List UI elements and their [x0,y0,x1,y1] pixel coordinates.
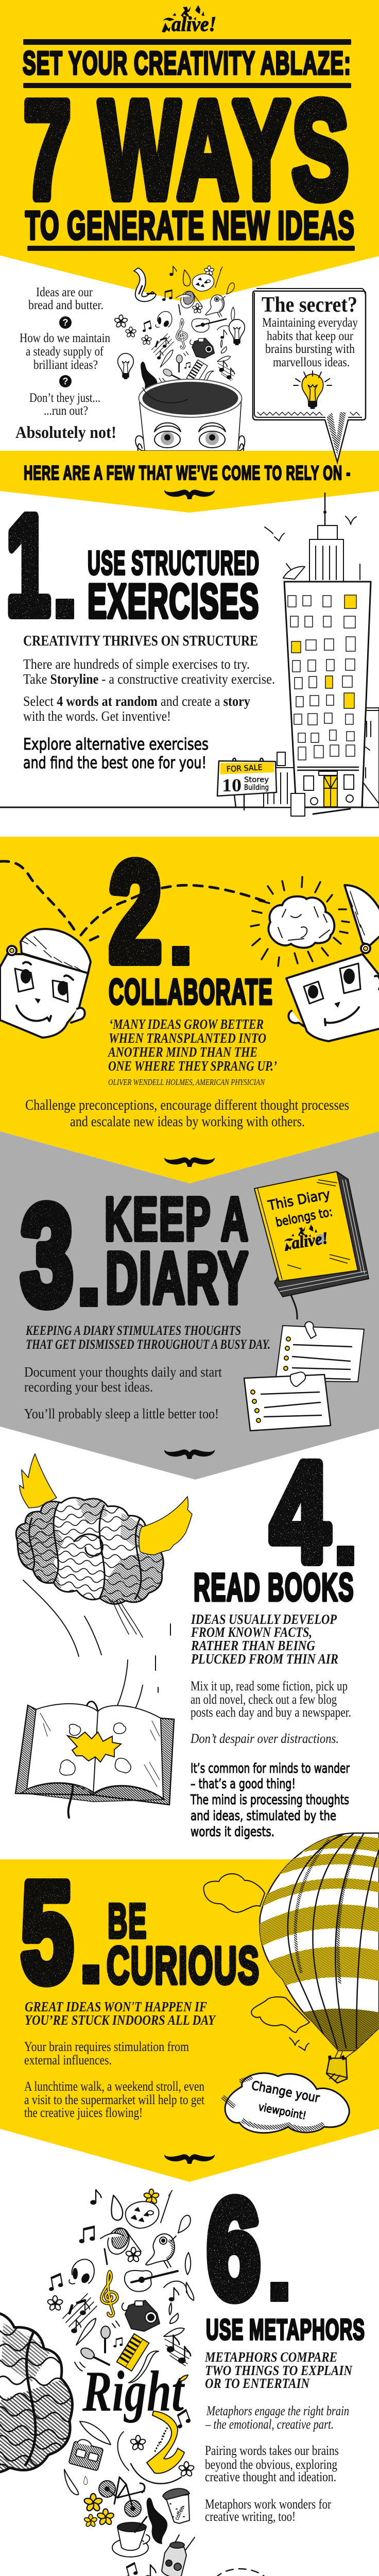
icon: speech drop [178,2215,191,2233]
subheading [25,1323,270,1352]
panel: header [0,0,379,303]
quote attribution: OLIVER WENDELL HOLMES, AMERICAN PHYSICIAN [108,1077,265,1087]
illustration: pinned note back [275,1321,364,1382]
icon: bicycle [99,2477,145,2517]
windows [288,595,356,760]
text block: intro questions: bread and butter. [28,298,104,312]
number: 2: 2 [109,834,164,990]
quote: ANOTHER MIND THAN THE [107,1044,257,1060]
icon: note [169,2287,179,2301]
icon: maraca [101,2321,119,2352]
subheading: THAT GET DISMISSED THROUGHOUT A BUSY DAY. [26,1337,270,1352]
text: this diary belongs to: belongs to: [274,1205,334,1230]
icon: notes [79,2226,95,2243]
icon: drops [64,2469,88,2495]
illustration: winged brain [0,1454,192,1637]
icon: sheet music [63,2294,97,2333]
icon: saxophone [131,2411,184,2484]
heading: keep a: KEEP A [105,1185,249,1253]
icon: treble clef [101,2272,117,2316]
icon: paint brush [161,2191,172,2223]
panel: intro [0,256,379,451]
icon: moustache divider [164,2154,215,2164]
subheading: YOU’RE STUCK INDOORS ALL DAY [25,2012,216,2028]
icon: left eye [154,423,181,448]
body text: beyond the obvious, exploring [205,2457,337,2472]
icon: right wing [139,1497,192,1555]
handwritten note [190,1761,350,1840]
icon: notes [123,2563,139,2576]
body text: and escalate new ideas by working with others. [70,1114,305,1130]
icon: small notes [113,2337,123,2347]
text: maintaining habits: brains bursting with [265,342,355,356]
number: 5: 5 [21,1854,76,2010]
body text: Pairing words takes our brains [205,2443,339,2458]
icon: drum stick [105,2249,107,2264]
icon: boombox [68,2439,104,2471]
icon: brain stem [112,1600,143,1637]
icon: burst [67,1732,121,1762]
body text [25,1097,349,1130]
handwritten note: – that’s a good thing! [191,1776,296,1792]
body text: the creative juices flowing! [24,2105,143,2120]
icon: tea cup [112,2517,150,2557]
icon: yellow drop [179,2375,188,2381]
body text: Metaphors work wonders for [205,2497,331,2512]
body text: creative writing, too! [205,2509,296,2524]
subheading: IDEAS USUALLY DEVELOP [191,1612,337,1627]
text: the secret: The secret? [262,293,357,317]
number: 3: 3 [21,1177,76,1333]
handwritten note: explore alternatives: and find the best one for you! [23,754,206,772]
subheading [191,1612,338,1667]
sign: for sale 10 storey building: Building [244,784,269,792]
icon: right bulb [229,319,245,345]
text block: storyline exercise: Select 4 words at random and create a story [23,693,250,709]
icon: ears [135,436,245,451]
text block: intro questions: Absolutely not! [15,423,116,442]
number: 6: 6 [207,2171,263,2327]
icon: moustache divider [164,489,215,499]
italic note [205,2403,349,2432]
word: right: Right [82,2360,185,2424]
body text: Your brain requires stimulation from [24,2039,189,2054]
quote: WHEN TRANSPLANTED INTO [109,1030,266,1046]
icon: flower [125,2247,142,2263]
panel: 2 collaborate [0,834,379,1183]
number: 4: 4 [271,1434,332,1590]
illustration: ideas doodles above head [141,266,237,392]
quote: ONE WHERE THEY SPRANG UP.’ [108,1058,277,1074]
subheading: FROM KNOWN FACTS, [191,1624,312,1640]
icon: jar [162,2535,195,2576]
icon: drops [164,2303,184,2336]
text block: storyline exercise: with the words. Get inventive! [23,708,171,724]
panel: 1 use structured exercises [0,487,379,837]
text: this diary belongs to [266,1187,335,1231]
heading: curious: CURIOUS [107,1936,260,1995]
icon: satellite dish [283,564,305,579]
panel: 6 use metaphors [0,2129,379,2576]
illustration: right brain half [0,2286,107,2503]
icon: moustache [141,362,158,399]
sign: for sale 10 storey building: FOR SALE [226,762,263,774]
illustration: pinned note front [244,1372,331,1431]
illustration: hot air balloon [255,1832,379,2083]
icon: drop [109,2194,124,2221]
body text [190,1679,351,1746]
subheading [204,2349,353,2391]
icon: moustache divider [164,1449,215,1459]
italic note: – the emotional, creative part. [205,2417,334,2432]
illustration: cloud under balloon [251,1997,309,2032]
subheading: TWO THINGS TO EXPLAIN [205,2363,353,2378]
text block: intro questions: brilliant ideas? [33,358,98,372]
subheading: METAPHORS COMPARE [204,2349,337,2365]
text block: intro questions: ? [63,376,68,386]
text block: storyline exercise: Take Storyline - a constructive creativity exercise. [23,671,275,687]
icon: moustache [147,2498,167,2544]
body text: a visit to the supermarket will help to get [24,2092,205,2107]
icon: flower [143,2189,160,2205]
icon: maraca two [75,2346,109,2371]
icon: smoke clouds [60,1723,131,1775]
handwritten note: explore alternatives: Explore alternative exercises [23,735,209,754]
subheading: KEEPING A DIARY STIMULATES THOUGHTS [25,1323,241,1338]
text: maintaining habits: habits that keep our [267,329,354,343]
text: maintaining habits: Maintaining everyday [262,316,358,330]
heading: diary: DIARY [106,1237,249,1318]
quote [107,1016,277,1074]
icon: flower [47,2296,63,2311]
text block: intro questions: ...run out? [44,404,88,418]
illustration: flying brain with rays [251,877,349,966]
icon: moustache divider [164,1157,215,1167]
body text: external influences. [24,2053,112,2067]
text block: intro questions [15,285,116,442]
illustration: motion lines [23,1580,170,1732]
subheading: GREAT IDEAS WON'T HAPPEN IF [25,1999,207,2014]
handwritten note: words it digests. [191,1824,274,1840]
icon: plant swirl [164,2281,194,2300]
icon: bird [146,2234,176,2268]
icon: extra flowers [114,315,136,337]
icon: left bulb [118,353,133,379]
body text: Don’t despair over distractions. [190,1731,339,1746]
callout: the secret speech bubble [253,289,366,462]
icon: yellow bulb [294,371,332,409]
subheading [25,1999,216,2028]
body text: an old novel, check out a few blog [191,1692,337,1707]
icon: left wing [20,1454,57,1508]
rule: top [23,39,351,45]
dashed idea path [0,861,268,940]
subheading: creativity thrives on structure: CREATIVITY THRIVES ON STRUCTURE [23,633,258,649]
text block: intro questions: a steady supply of [26,345,104,359]
icon: yellow flowers [83,2494,114,2528]
body text: You’ll probably sleep a little better too! [24,1406,219,1421]
icon: long drop [76,2318,96,2345]
panel: few we rely on banner [0,451,379,513]
rule: middle [23,83,351,88]
body text [205,2443,339,2524]
text block: storyline exercise: There are hundreds of simple exercises to try. [23,656,250,672]
ground line [0,807,379,808]
icon: curl [129,2351,159,2383]
icon: ribbon [68,1785,73,1818]
icon: flower [178,2462,195,2477]
illustration: diary book [254,1172,369,1319]
body text: A lunchtime walk, a weekend stroll, even [24,2079,204,2094]
handwritten note: and ideas, stimulated by the [191,1808,336,1824]
panel: 3 keep a diary [0,1131,379,1480]
illustration: head with open top [135,379,245,451]
icon: headphones [69,2259,94,2284]
icon: palette [126,2201,159,2228]
icon: leaf [80,2421,129,2470]
icon: keyboard [117,2334,149,2371]
callout: change your viewpoint cloud: viewpoint! [257,2100,307,2122]
icon: notes [47,2274,64,2291]
icon: coffee cup [163,2488,190,2523]
text block: intro questions: Don’t they just... [29,391,100,405]
rule: bottom [27,246,355,251]
icon: coffee cup: coffee [174,2505,185,2521]
icon: saxophone [134,268,156,301]
icon: leaf [185,2252,191,2275]
illustration: creative doodle cluster [47,2189,194,2383]
text: this diary belongs to: This Diary [266,1187,332,1214]
heading: exercises: EXERCISES [88,574,260,628]
illustration: left head [0,929,91,1038]
text block: intro questions: ? [63,317,68,328]
icon: note [145,2565,156,2576]
sign: for sale 10 storey building: Storey [244,776,269,784]
illustration: small cloud behind balloon [203,1874,265,1912]
icon: notes [173,2410,192,2429]
panel: 4 read books [0,1427,379,1859]
quote: ‘MANY IDEAS GROW BETTER [109,1016,264,1032]
text: maintaining habits: marvellous ideas. [273,355,350,369]
icon: drum [100,2225,141,2257]
number: 1: 1 [6,487,53,643]
brain [15,1497,164,1605]
subheading: PLUCKED FROM THIN AIR [191,1651,338,1667]
body text [24,1364,222,1421]
logo: alive on diary [281,1222,330,1254]
sign: for sale 10 storey building [217,758,277,810]
handwritten note: explore alternatives [23,735,209,772]
icon: sheet music [165,2335,191,2366]
text block: intro questions: Ideas are our [36,285,93,299]
sign: for sale 10 storey building: 10 [222,775,242,795]
icon: note [90,2190,101,2205]
illustration: open book with burst [15,1701,174,1818]
subheading: OR TO ENTERTAIN [205,2376,310,2391]
panel: 7 teach [0,2569,379,2576]
door [291,771,354,816]
body text: recording your best ideas. [24,1379,153,1395]
icon: right eye [199,423,226,448]
body text [24,2039,205,2120]
illustration: right head [286,885,379,1041]
panel: 5 be curious [0,1832,379,2182]
body text: Document your thoughts daily and start [24,1364,222,1380]
text block: intro questions: How do we maintain [20,331,110,345]
subheading: RATHER THAN BEING [191,1638,315,1653]
illustration: dashed flight path [169,2569,277,2576]
icon: flower [130,2435,146,2451]
icon: birds [289,2038,309,2050]
text block: storyline exercise [23,656,275,724]
text: maintaining habits [262,316,358,369]
icon: basket [326,2058,347,2083]
callout: change your viewpoint cloud [222,2073,349,2133]
heading: be: BE [108,1894,147,1948]
icon: camera [122,2300,160,2331]
callout: change your viewpoint cloud: Change your [250,2078,321,2106]
body text: creative thought and ideation. [205,2469,336,2484]
icon: guitar [125,2270,178,2292]
illustration: tall building [283,493,371,816]
icon: birds [265,516,356,541]
illustration: neighbouring buildings [264,708,379,807]
logo: alive [162,5,216,36]
